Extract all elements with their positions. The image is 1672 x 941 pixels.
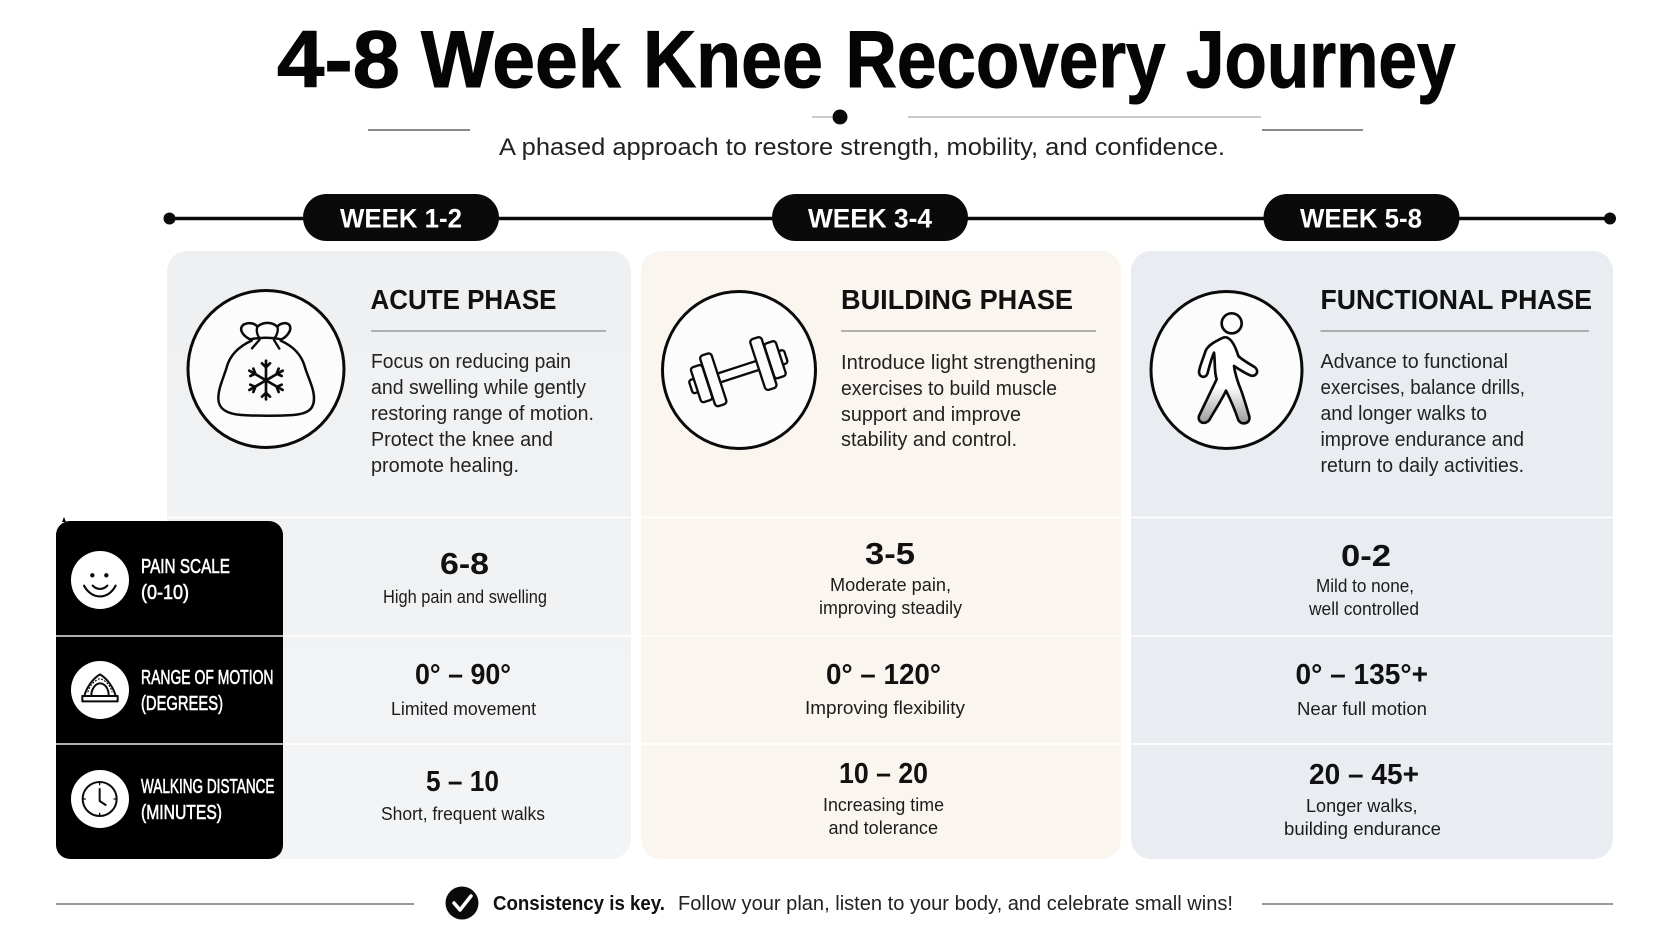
building phase description: stability and control. xyxy=(841,429,1017,451)
week 5-8 pill xyxy=(1264,194,1460,241)
range of motion value: building: Improving flexibility xyxy=(805,698,965,718)
icon: clock xyxy=(71,770,129,828)
timeline xyxy=(164,194,1616,241)
icon: protractor xyxy=(71,661,129,719)
heading: functional phase: FUNCTIONAL PHASE xyxy=(1320,284,1592,315)
building phase description: Introduce light strengthening xyxy=(841,352,1096,374)
walking value: acute xyxy=(381,766,545,824)
range of motion value: acute xyxy=(391,659,536,719)
label: walking distance: WALKING DISTANCE xyxy=(141,776,274,798)
building phase description xyxy=(841,352,1096,451)
pain value: functional: 0-2 xyxy=(1341,538,1391,573)
footer message: Follow your plan, listen to your body, and celebrate small wins! xyxy=(678,893,1233,915)
functional phase description: improve endurance and xyxy=(1320,429,1524,451)
icon: walking person xyxy=(1151,292,1302,448)
panel: acute phase xyxy=(167,251,631,859)
functional phase description: exercises, balance drills, xyxy=(1320,377,1525,399)
label: range of motion xyxy=(141,667,274,715)
label: pain scale: (0-10) xyxy=(141,582,189,604)
pain value: building: improving steadily xyxy=(819,598,962,618)
walking value: acute: Short, frequent walks xyxy=(381,804,545,824)
label: pain scale: PAIN SCALE xyxy=(141,556,230,578)
title: 4-8 xyxy=(277,15,400,105)
acute phase description: and swelling while gently xyxy=(371,377,586,399)
heading: acute phase: ACUTE PHASE xyxy=(370,284,556,315)
label: range of motion: (DEGREES) xyxy=(141,693,223,715)
pain value: building xyxy=(819,536,962,618)
pain value: functional: Mild to none, xyxy=(1316,576,1414,596)
walking value: functional xyxy=(1284,759,1441,839)
range of motion value: acute: Limited movement xyxy=(391,699,536,719)
title: Journey xyxy=(1186,15,1456,105)
functional phase description xyxy=(1320,351,1525,477)
building phase description: support and improve xyxy=(841,404,1021,426)
label: walking distance xyxy=(141,776,274,824)
title xyxy=(277,15,1456,105)
icon: dumbbell xyxy=(662,292,816,448)
subtitle: A phased approach to restore strength, mobility, and confidence. xyxy=(499,134,1225,161)
pain value: building: 3-5 xyxy=(865,536,915,571)
functional phase description: and longer walks to xyxy=(1320,403,1487,425)
pain value: building: Moderate pain, xyxy=(830,575,951,595)
heading: building phase: BUILDING PHASE xyxy=(841,284,1073,315)
functional phase description: return to daily activities. xyxy=(1320,455,1524,477)
pain value: acute: 6-8 xyxy=(440,546,489,581)
acute phase description: restoring range of motion. xyxy=(371,403,594,425)
pain value: functional: well controlled xyxy=(1308,599,1419,619)
icon: ice bag xyxy=(188,290,344,448)
panel: functional phase xyxy=(1131,251,1613,859)
pain value: functional xyxy=(1308,538,1419,619)
walking value: functional: Longer walks, xyxy=(1306,796,1418,816)
pain value: acute: High pain and swelling xyxy=(383,587,547,607)
range of motion value: functional: Near full motion xyxy=(1297,699,1427,719)
metrics sidebar xyxy=(56,517,283,859)
icon: smiley xyxy=(71,551,129,609)
week 1-2 pill xyxy=(303,194,499,241)
walking value: building: and tolerance xyxy=(828,818,938,838)
acute phase description: Protect the knee and xyxy=(371,429,553,451)
title: Knee xyxy=(643,15,823,105)
title: Recovery xyxy=(846,15,1166,105)
week 3-4 pill: WEEK 3-4 xyxy=(808,204,932,234)
pain value: acute xyxy=(383,546,547,607)
range of motion value: functional: 0° – 135°+ xyxy=(1296,659,1428,691)
week 1-2 pill: WEEK 1-2 xyxy=(340,204,462,234)
range of motion value: building: 0° – 120° xyxy=(826,659,941,691)
title divider xyxy=(368,110,1363,130)
functional phase description: Advance to functional xyxy=(1320,351,1508,373)
acute phase description: Focus on reducing pain xyxy=(371,351,571,373)
footer message: Consistency is key. xyxy=(493,893,665,915)
icon: check mark xyxy=(446,886,478,920)
walking value: building xyxy=(823,758,944,838)
week 5-8 pill: WEEK 5-8 xyxy=(1300,204,1422,234)
title: Week xyxy=(421,15,621,105)
label: pain scale xyxy=(141,556,230,604)
range of motion value: functional xyxy=(1296,659,1428,719)
building phase description: exercises to build muscle xyxy=(841,378,1057,400)
footer xyxy=(56,886,1613,920)
label: range of motion: RANGE OF MOTION xyxy=(141,667,274,689)
walking value: building: Increasing time xyxy=(823,795,944,815)
week 3-4 pill xyxy=(772,194,968,241)
range of motion value: acute: 0° – 90° xyxy=(415,659,511,691)
acute phase description xyxy=(371,351,594,477)
acute phase description: promote healing. xyxy=(371,455,519,477)
range of motion value: building xyxy=(805,659,965,718)
panel: building phase xyxy=(641,251,1121,859)
label: walking distance: (MINUTES) xyxy=(141,802,222,824)
walking value: acute: 5 – 10 xyxy=(426,766,499,798)
walking value: building: 10 – 20 xyxy=(839,758,928,790)
walking value: functional: 20 – 45+ xyxy=(1309,759,1419,791)
walking value: functional: building endurance xyxy=(1284,819,1441,839)
